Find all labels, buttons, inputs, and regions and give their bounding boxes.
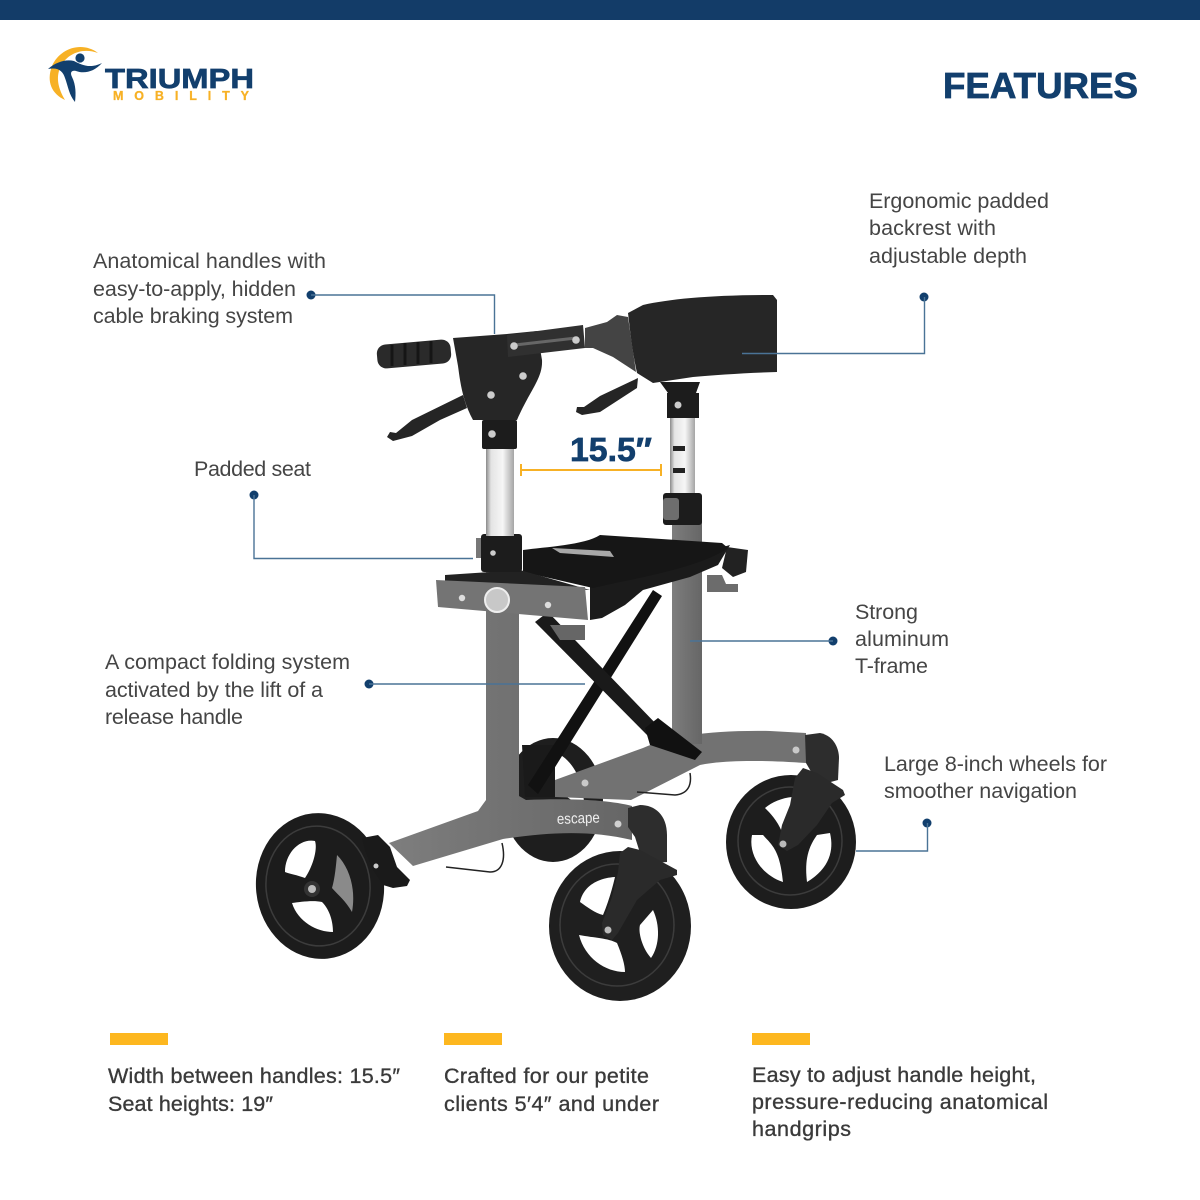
callout: folding system <box>105 650 585 729</box>
silver right tube <box>670 416 695 496</box>
main frame T: escape <box>557 810 600 828</box>
backrest pad <box>628 295 777 383</box>
callout: handles <box>93 249 494 334</box>
feature: petite fit <box>444 1033 659 1116</box>
callout: t-frame: Strong <box>855 600 918 624</box>
brake levers <box>387 378 638 441</box>
callout: t-frame <box>690 600 949 678</box>
callout: wheels: Large 8-inch wheels for <box>884 752 1107 776</box>
callout: folding system: release handle <box>105 705 243 729</box>
folding cross bars <box>528 590 702 794</box>
callout: handles: Anatomical handles with <box>93 249 326 273</box>
logo: MOBILITY <box>113 89 250 103</box>
callout: backrest: Ergonomic padded <box>869 189 1049 213</box>
callout: backrest: backrest with <box>869 216 996 240</box>
callout: backrest: adjustable depth <box>869 244 1027 268</box>
feature: petite fit: Crafted for our petite <box>444 1064 649 1088</box>
feature: petite fit: clients 5′4″ and under <box>444 1092 659 1116</box>
right post <box>672 522 702 744</box>
dimension: width between handles: 15.5″ <box>570 431 652 468</box>
callout: folding system: A compact folding system <box>105 650 350 674</box>
callout: wheels: smoother navigation <box>884 779 1077 803</box>
walker product photo <box>249 295 856 1001</box>
height clamp <box>663 493 702 525</box>
callout: folding system: activated by the lift of a <box>105 678 323 702</box>
logo <box>48 47 254 103</box>
handle housing <box>453 331 542 449</box>
logo: TRIUMPH <box>105 63 254 94</box>
callout: handles: easy-to-apply, hidden <box>93 277 296 301</box>
callout: padded seat: Padded seat <box>194 457 311 481</box>
top banner <box>0 0 1200 20</box>
left wheel <box>249 807 410 965</box>
rear frame arm <box>555 731 806 800</box>
callout: backrest <box>742 189 1049 354</box>
feature: dimensions <box>108 1033 400 1116</box>
front wheel <box>549 805 691 1001</box>
dimension: width between handles <box>521 431 661 476</box>
callout: padded seat <box>194 457 473 558</box>
handle grip <box>376 339 452 369</box>
callout: handles: cable braking system <box>93 304 293 328</box>
right wheel <box>726 733 856 909</box>
seat collar <box>476 534 522 572</box>
callout: wheels <box>856 752 1107 851</box>
feature: dimensions: Seat heights: 19″ <box>108 1092 273 1116</box>
feature: dimensions: Width between handles: 15.5″ <box>108 1064 400 1088</box>
main frame T <box>389 565 632 866</box>
backrest collar <box>660 382 700 418</box>
back wheel <box>503 738 603 862</box>
depth slider arm <box>507 315 636 372</box>
feature: adjustment: Easy to adjust handle height, <box>752 1063 1036 1087</box>
silver left tube <box>486 448 514 536</box>
seat <box>436 535 748 620</box>
brake cables <box>446 773 690 872</box>
feature: adjustment: pressure-reducing anatomical <box>752 1090 1048 1114</box>
feature: adjustment: handgrips <box>752 1117 851 1141</box>
title: FEATURES <box>943 65 1138 106</box>
feature: adjustment <box>752 1033 1048 1141</box>
callout: t-frame: T-frame <box>855 654 928 678</box>
callout: t-frame: aluminum <box>855 627 949 651</box>
